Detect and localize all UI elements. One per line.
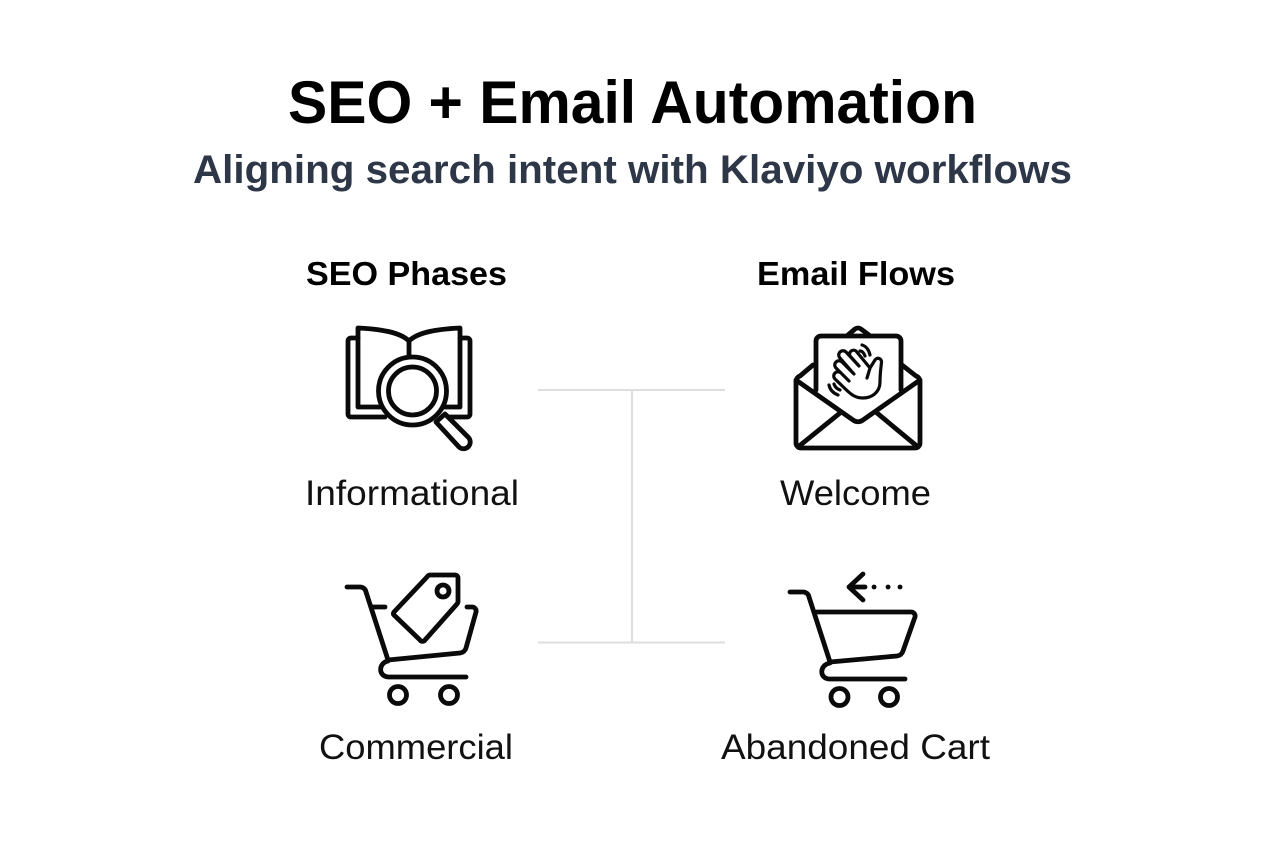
label: Informational: Informational [305, 474, 519, 513]
icon: shopping cart with price tag [347, 575, 476, 704]
label: Commercial: Commercial [319, 728, 513, 767]
icon: book with magnifying glass [348, 328, 470, 449]
heading: Email Flows: Email Flows [757, 255, 955, 292]
subtitle: Aligning search intent with Klaviyo workflows [193, 148, 1072, 192]
connector lines [538, 390, 725, 642]
label: Abandoned Cart: Abandoned Cart [721, 728, 990, 767]
title: SEO + Email Automation [288, 69, 977, 136]
icon: abandoned cart with back arrow [790, 574, 915, 706]
label: Welcome: Welcome [780, 474, 931, 513]
icon detail: waving hand [829, 345, 882, 398]
icon: envelope with waving hand [796, 328, 920, 448]
heading: SEO Phases: SEO Phases [306, 255, 507, 292]
